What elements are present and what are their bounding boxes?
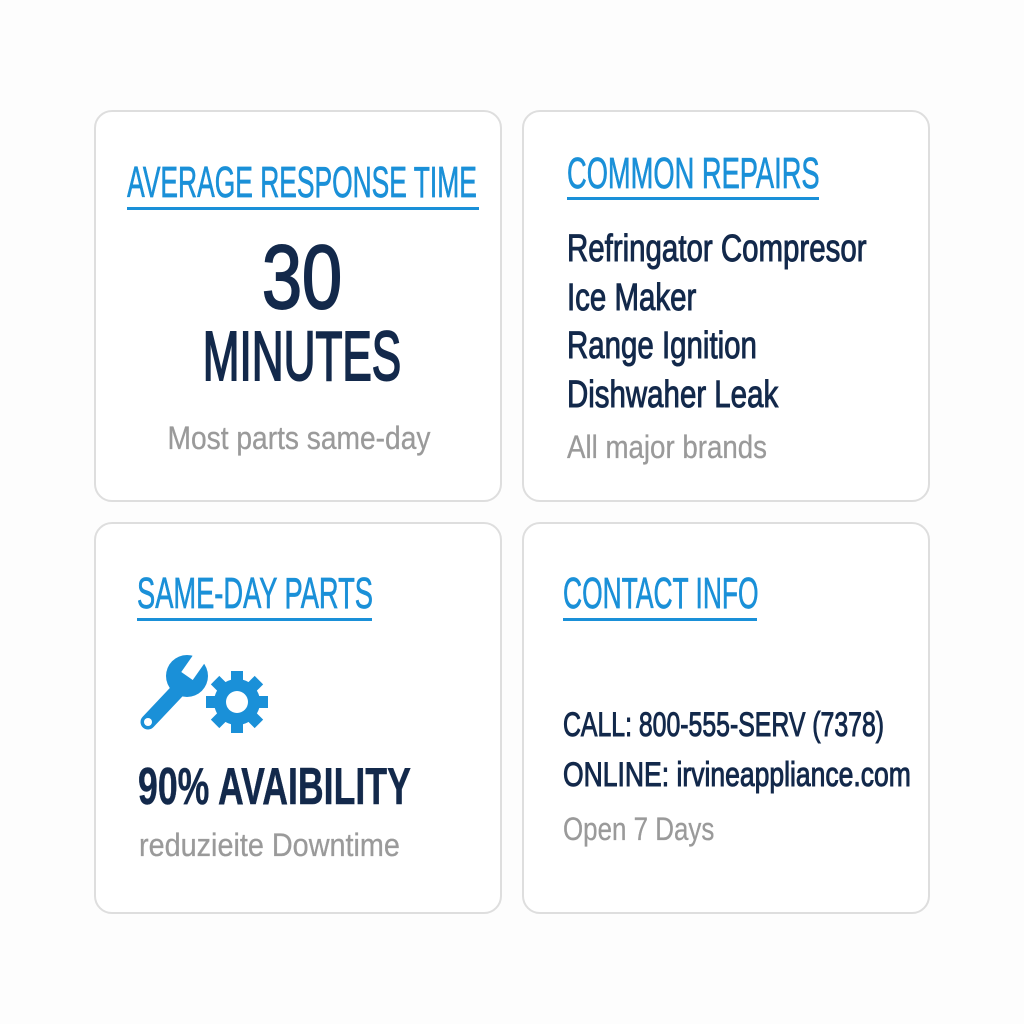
repairs list: Range Ignition: [567, 325, 757, 367]
heading: contact info: CONTACT INFO: [563, 569, 759, 618]
repairs list: Refringator Compresor: [567, 228, 867, 270]
heading: common repairs: COMMON REPAIRS: [567, 149, 820, 198]
stat: availability: 90% AVAIBILITY: [138, 758, 411, 816]
panel: common repairs: [522, 110, 930, 502]
panel: same-day parts: [94, 522, 502, 914]
repairs list: [567, 228, 867, 416]
note: brands: All major brands: [567, 429, 767, 465]
panel: contact info: [522, 522, 930, 914]
repairs list: Dishwaher Leak: [567, 374, 778, 416]
heading: average response time: AVERAGE RESPONSE TIME: [127, 158, 477, 207]
contact: phone: CALL: 800-555-SERV (7378): [563, 706, 884, 744]
panel: average response time: [94, 110, 502, 502]
contact: website: ONLINE: irvineappliance.com: [563, 756, 911, 794]
note: downtime: reduzieite Downtime: [139, 827, 400, 863]
note: open 7 days: Open 7 Days: [563, 811, 714, 847]
unit minutes: MINUTES: [203, 317, 401, 395]
big number 30: 30: [262, 228, 342, 328]
repairs list: Ice Maker: [567, 276, 696, 318]
heading: same-day parts: SAME-DAY PARTS: [137, 569, 373, 618]
note: same-day: Most parts same-day: [168, 420, 430, 456]
